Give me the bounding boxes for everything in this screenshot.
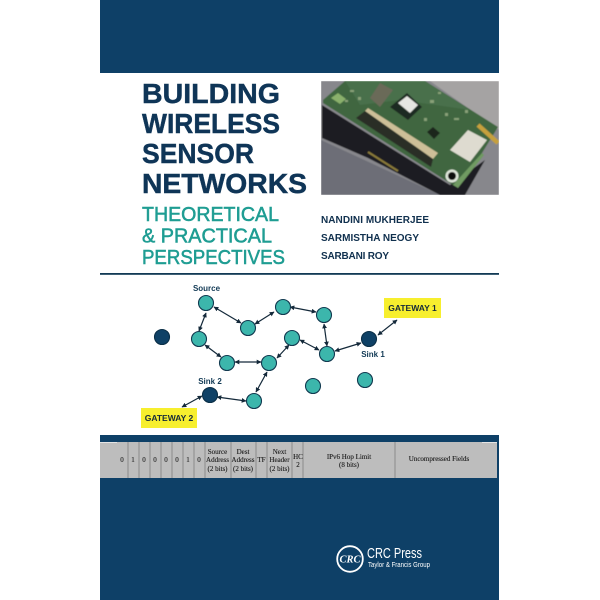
packet header table: TF (257, 456, 266, 464)
subtitle: PERSPECTIVES (142, 246, 285, 269)
CRC Press logo (337, 546, 430, 572)
packet header table: 0 (153, 456, 157, 464)
packet header table: (2 bits) (269, 465, 290, 473)
title (142, 78, 307, 199)
packet header table: Next (273, 448, 286, 456)
sensor nodes (192, 296, 372, 408)
authors: SARMISTHA NEOGY (321, 233, 419, 244)
packet header table: Dest (237, 448, 249, 456)
packet header table: 2 (296, 461, 300, 469)
packet header table: Address (232, 456, 255, 464)
packet header table: 0 (120, 456, 124, 464)
CRC Press logo: CRC Press (367, 546, 422, 562)
packet header table: Uncompressed Fields (409, 455, 470, 463)
gateway 2 label: GATEWAY 2 (145, 413, 194, 423)
bottom navy panel (100, 435, 499, 600)
sink nodes (154, 330, 376, 402)
packet header table: (8 bits) (339, 461, 360, 469)
authors (321, 215, 429, 262)
authors: NANDINI MUKHERJEE (321, 215, 429, 226)
node labels: Sink 2 (198, 377, 222, 386)
gateway 1 label: GATEWAY 1 (388, 303, 437, 313)
packet header table: Address (206, 456, 229, 464)
packet header table: (2 bits) (233, 465, 254, 473)
gateway 2 label (141, 408, 197, 428)
gateway 1 label (384, 298, 441, 318)
packet header table: Source (208, 448, 227, 456)
subtitle: THEORETICAL (142, 203, 279, 226)
arrows between nodes (182, 307, 397, 407)
CRC Press logo: Taylor & Francis Group (368, 562, 430, 569)
packet header table: 0 (175, 456, 179, 464)
subtitle: & PRACTICAL (142, 224, 272, 248)
packet header table: 0 (197, 456, 201, 464)
packet header table: IPv6 Hop Limit (327, 453, 371, 461)
packet header table: 0 (142, 456, 146, 464)
node labels (193, 284, 385, 386)
packet header table (100, 442, 497, 478)
title: NETWORKS (142, 168, 307, 199)
divider rule (100, 273, 499, 275)
subtitle (142, 203, 285, 269)
title: SENSOR (142, 138, 254, 169)
title: BUILDING (142, 78, 280, 109)
icon: CRC circle: CRC (339, 554, 361, 566)
node labels: Sink 1 (361, 350, 385, 359)
network diagram (141, 284, 441, 428)
packet header table: (2 bits) (207, 465, 228, 473)
packet header table: 0 (164, 456, 168, 464)
packet header table: Header (269, 456, 290, 464)
title: WIRELESS (142, 108, 280, 139)
node labels: Source (193, 284, 221, 293)
packet header table: 1 (186, 456, 190, 464)
top navy band (100, 0, 499, 73)
authors: SARBANI ROY (321, 251, 389, 262)
photo: sensor board (321, 81, 499, 195)
packet header table: 1 (131, 456, 135, 464)
packet header table: HC (293, 453, 303, 461)
